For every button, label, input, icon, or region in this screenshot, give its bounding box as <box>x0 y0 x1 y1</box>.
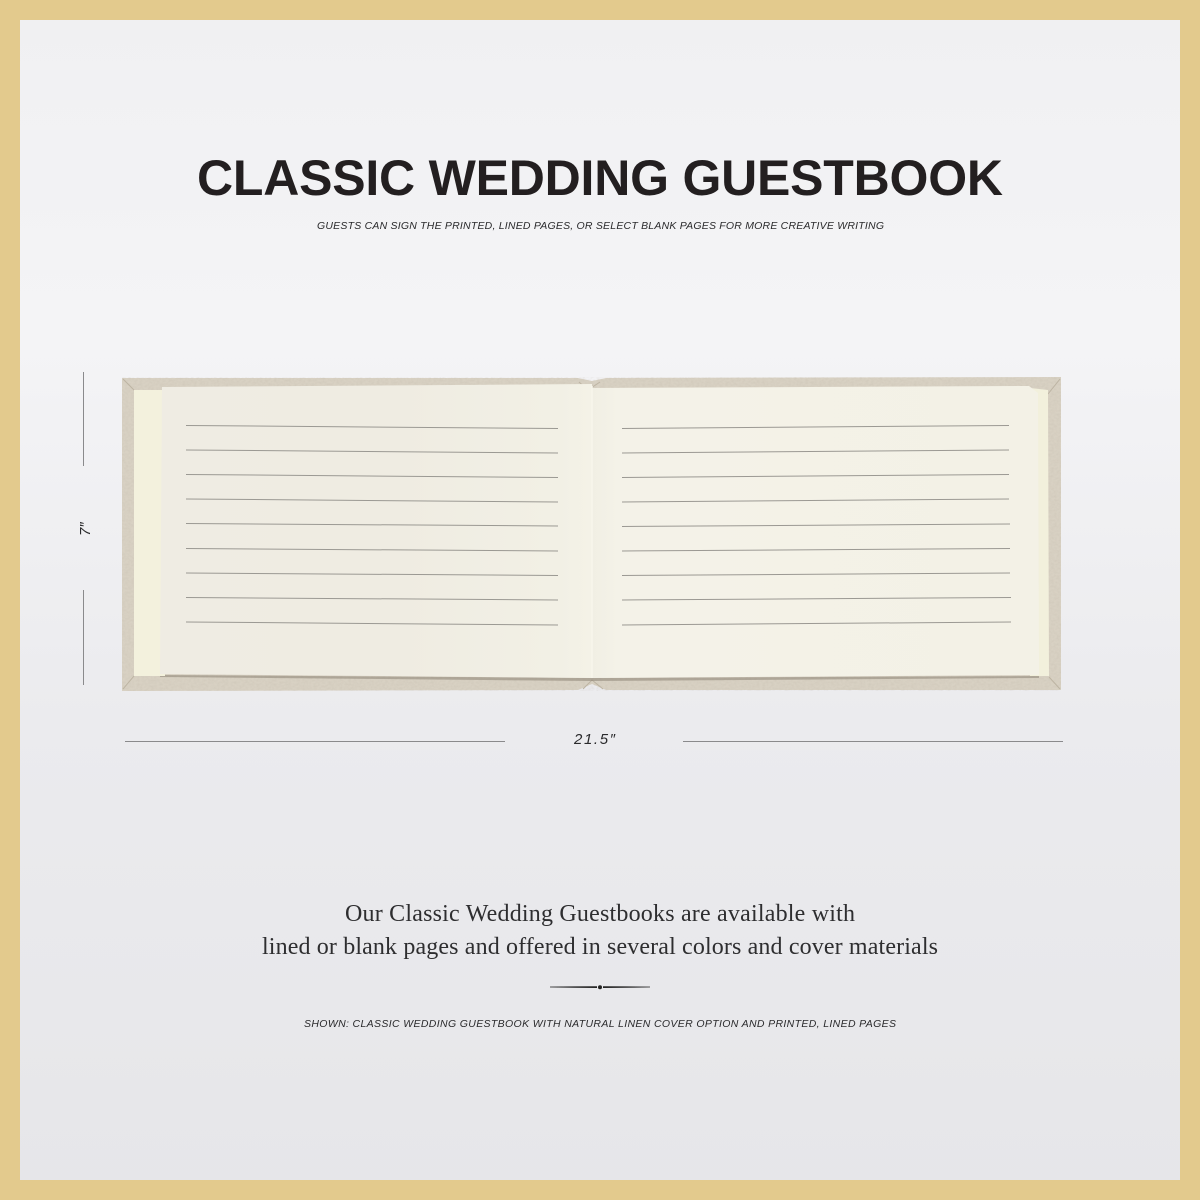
cover corner and spine folds <box>123 379 1060 689</box>
page shadow on cover <box>160 675 1039 681</box>
caption: SHOWN: CLASSIC WEDDING GUESTBOOK WITH NATURAL LINEN COVER OPTION AND PRINTED, LINED PAGES <box>304 1018 896 1030</box>
ornament divider <box>550 985 650 989</box>
left page rules <box>186 426 558 625</box>
width dimension line <box>125 740 1063 742</box>
left inner sheet <box>134 390 165 676</box>
height dimension line <box>82 372 84 685</box>
description: lined or blank pages and offered in several colors and cover materials <box>262 934 938 960</box>
height label: 7″ <box>77 522 94 536</box>
spine fold <box>591 386 593 678</box>
right inner sheet <box>1030 388 1049 676</box>
right page <box>592 386 1039 678</box>
right page rules <box>622 426 1011 625</box>
description <box>262 901 938 960</box>
linen cover <box>122 377 1061 691</box>
open guestbook <box>122 377 1061 691</box>
description: Our Classic Wedding Guestbooks are available with <box>345 901 855 927</box>
subtitle: GUESTS CAN SIGN THE PRINTED, LINED PAGES, OR SELECT BLANK PAGES FOR MORE CREATIVE WRITING <box>317 220 884 232</box>
title: CLASSIC WEDDING GUESTBOOK <box>197 150 1003 206</box>
width label: 21.5″ <box>573 731 616 748</box>
left page <box>160 384 592 678</box>
